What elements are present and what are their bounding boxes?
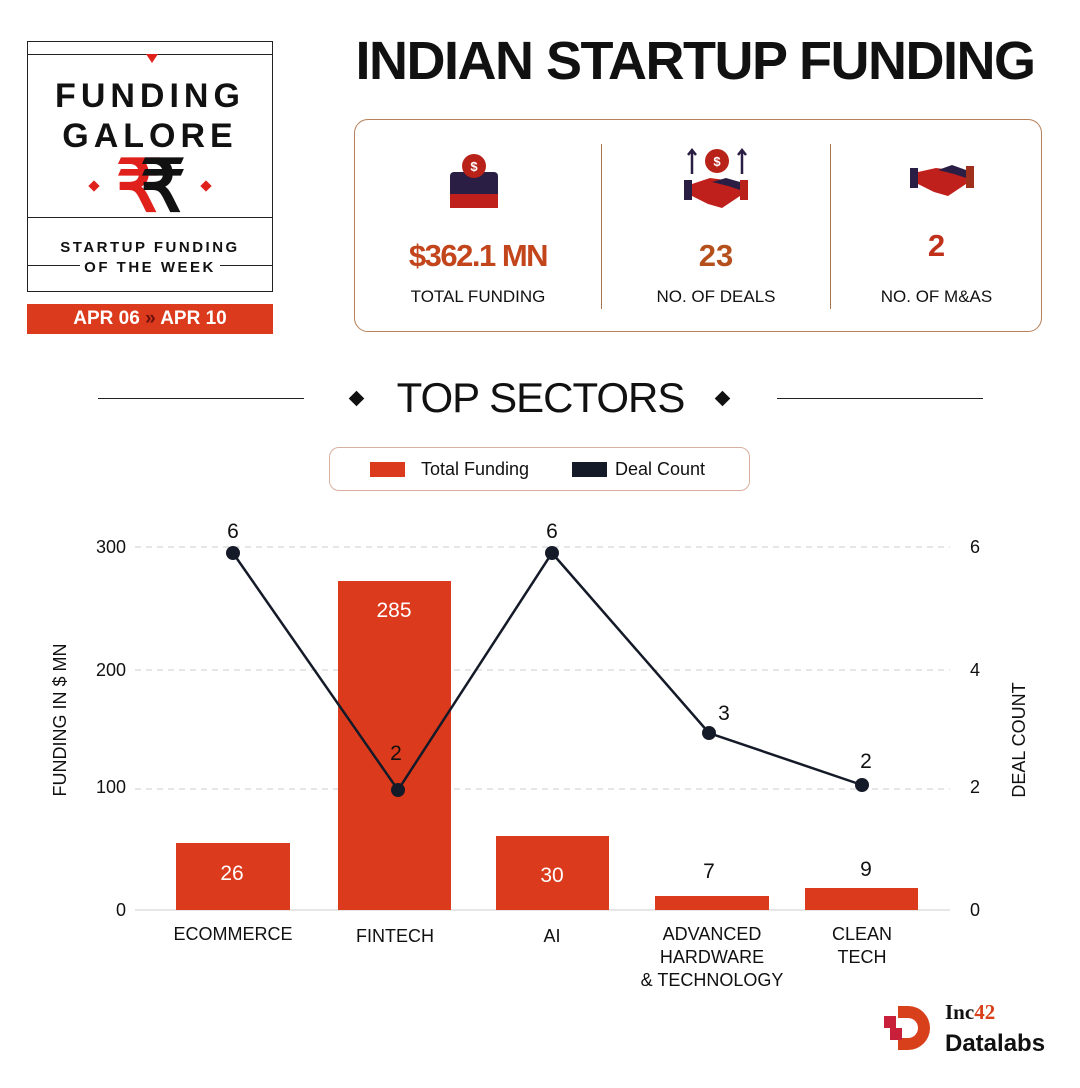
x labels: FINTECH [356, 926, 434, 946]
title: INDIAN STARTUP FUNDING [356, 31, 1034, 91]
left axis [50, 537, 126, 920]
badge title: GALORE [62, 117, 238, 155]
left axis: 300 [96, 537, 126, 557]
x labels: ECOMMERCE [173, 924, 293, 944]
bars [176, 581, 918, 910]
badge subtitle [60, 239, 240, 276]
badge title [55, 77, 245, 155]
icon: small diamond top [146, 54, 158, 63]
x labels: ADVANCED [663, 924, 761, 944]
date banner: APR 06 » APR 10 [73, 308, 227, 329]
panel: stats [354, 119, 1042, 332]
icon: rupee symbols [116, 154, 186, 220]
x labels: CLEAN [832, 924, 892, 944]
right axis: 0 [970, 900, 980, 920]
chart: sectors: 6 [227, 520, 239, 543]
left axis: 200 [96, 660, 126, 680]
icon: handshake with coin: $ [713, 154, 721, 169]
bar labels: 9 [860, 858, 872, 881]
line: deal count [233, 553, 862, 790]
icon: money box [450, 154, 498, 208]
x labels: HARDWARE [660, 947, 764, 967]
logo: Inc42 Datalabs [884, 1000, 1045, 1057]
icon: handshake [910, 165, 974, 196]
x labels: AI [543, 926, 561, 946]
icon: handshake with coin [684, 148, 748, 208]
chart: sectors: 6 [546, 520, 558, 543]
bar labels [220, 599, 872, 887]
chart: sectors: 2 [390, 742, 402, 765]
icon: money box: $ [470, 159, 478, 174]
bar labels: 30 [540, 864, 564, 887]
stat: total funding [409, 154, 547, 306]
heading: top sectors: TOP SECTORS [397, 374, 684, 421]
stat: M&As: NO. OF M&AS [881, 287, 992, 306]
right axis: 6 [970, 537, 980, 557]
date banner [27, 304, 273, 334]
x labels: & TECHNOLOGY [641, 970, 783, 990]
left axis: 0 [116, 900, 126, 920]
logo: Inc42 Datalabs: Inc42 [945, 1000, 995, 1024]
right axis: 2 [970, 777, 980, 797]
badge title: FUNDING [55, 77, 245, 115]
bar labels: 26 [220, 862, 244, 885]
stat: total funding: TOTAL FUNDING [411, 287, 545, 306]
x labels [173, 924, 892, 990]
x labels: TECH [838, 947, 886, 967]
right axis: 4 [970, 660, 980, 680]
legend: Total Funding [421, 459, 529, 479]
stat: M&As [881, 165, 992, 306]
logo: Inc42 Datalabs: Datalabs [945, 1030, 1045, 1057]
bar labels: 7 [703, 860, 715, 883]
badge subtitle: OF THE WEEK [84, 259, 216, 276]
stat: deals: NO. OF DEALS [656, 287, 776, 306]
badge: funding galore [27, 41, 273, 292]
stat: deals [656, 148, 776, 306]
legend: Deal Count [615, 459, 705, 479]
right axis: DEAL COUNT [1009, 682, 1029, 798]
chart: sectors: 3 [718, 702, 730, 725]
chart: sectors [50, 520, 1029, 990]
heading: top sectors [98, 374, 983, 421]
right axis [970, 537, 1029, 920]
chart: sectors: 2 [860, 750, 872, 773]
stat: deals: 23 [699, 238, 733, 273]
left axis: 100 [96, 777, 126, 797]
stat: total funding: $362.1 MN [409, 238, 547, 273]
legend [329, 447, 750, 491]
stat: M&As: 2 [928, 228, 945, 263]
badge subtitle: STARTUP FUNDING [60, 239, 240, 256]
left axis: FUNDING IN $ MN [50, 644, 70, 796]
bar labels: 285 [376, 599, 412, 622]
